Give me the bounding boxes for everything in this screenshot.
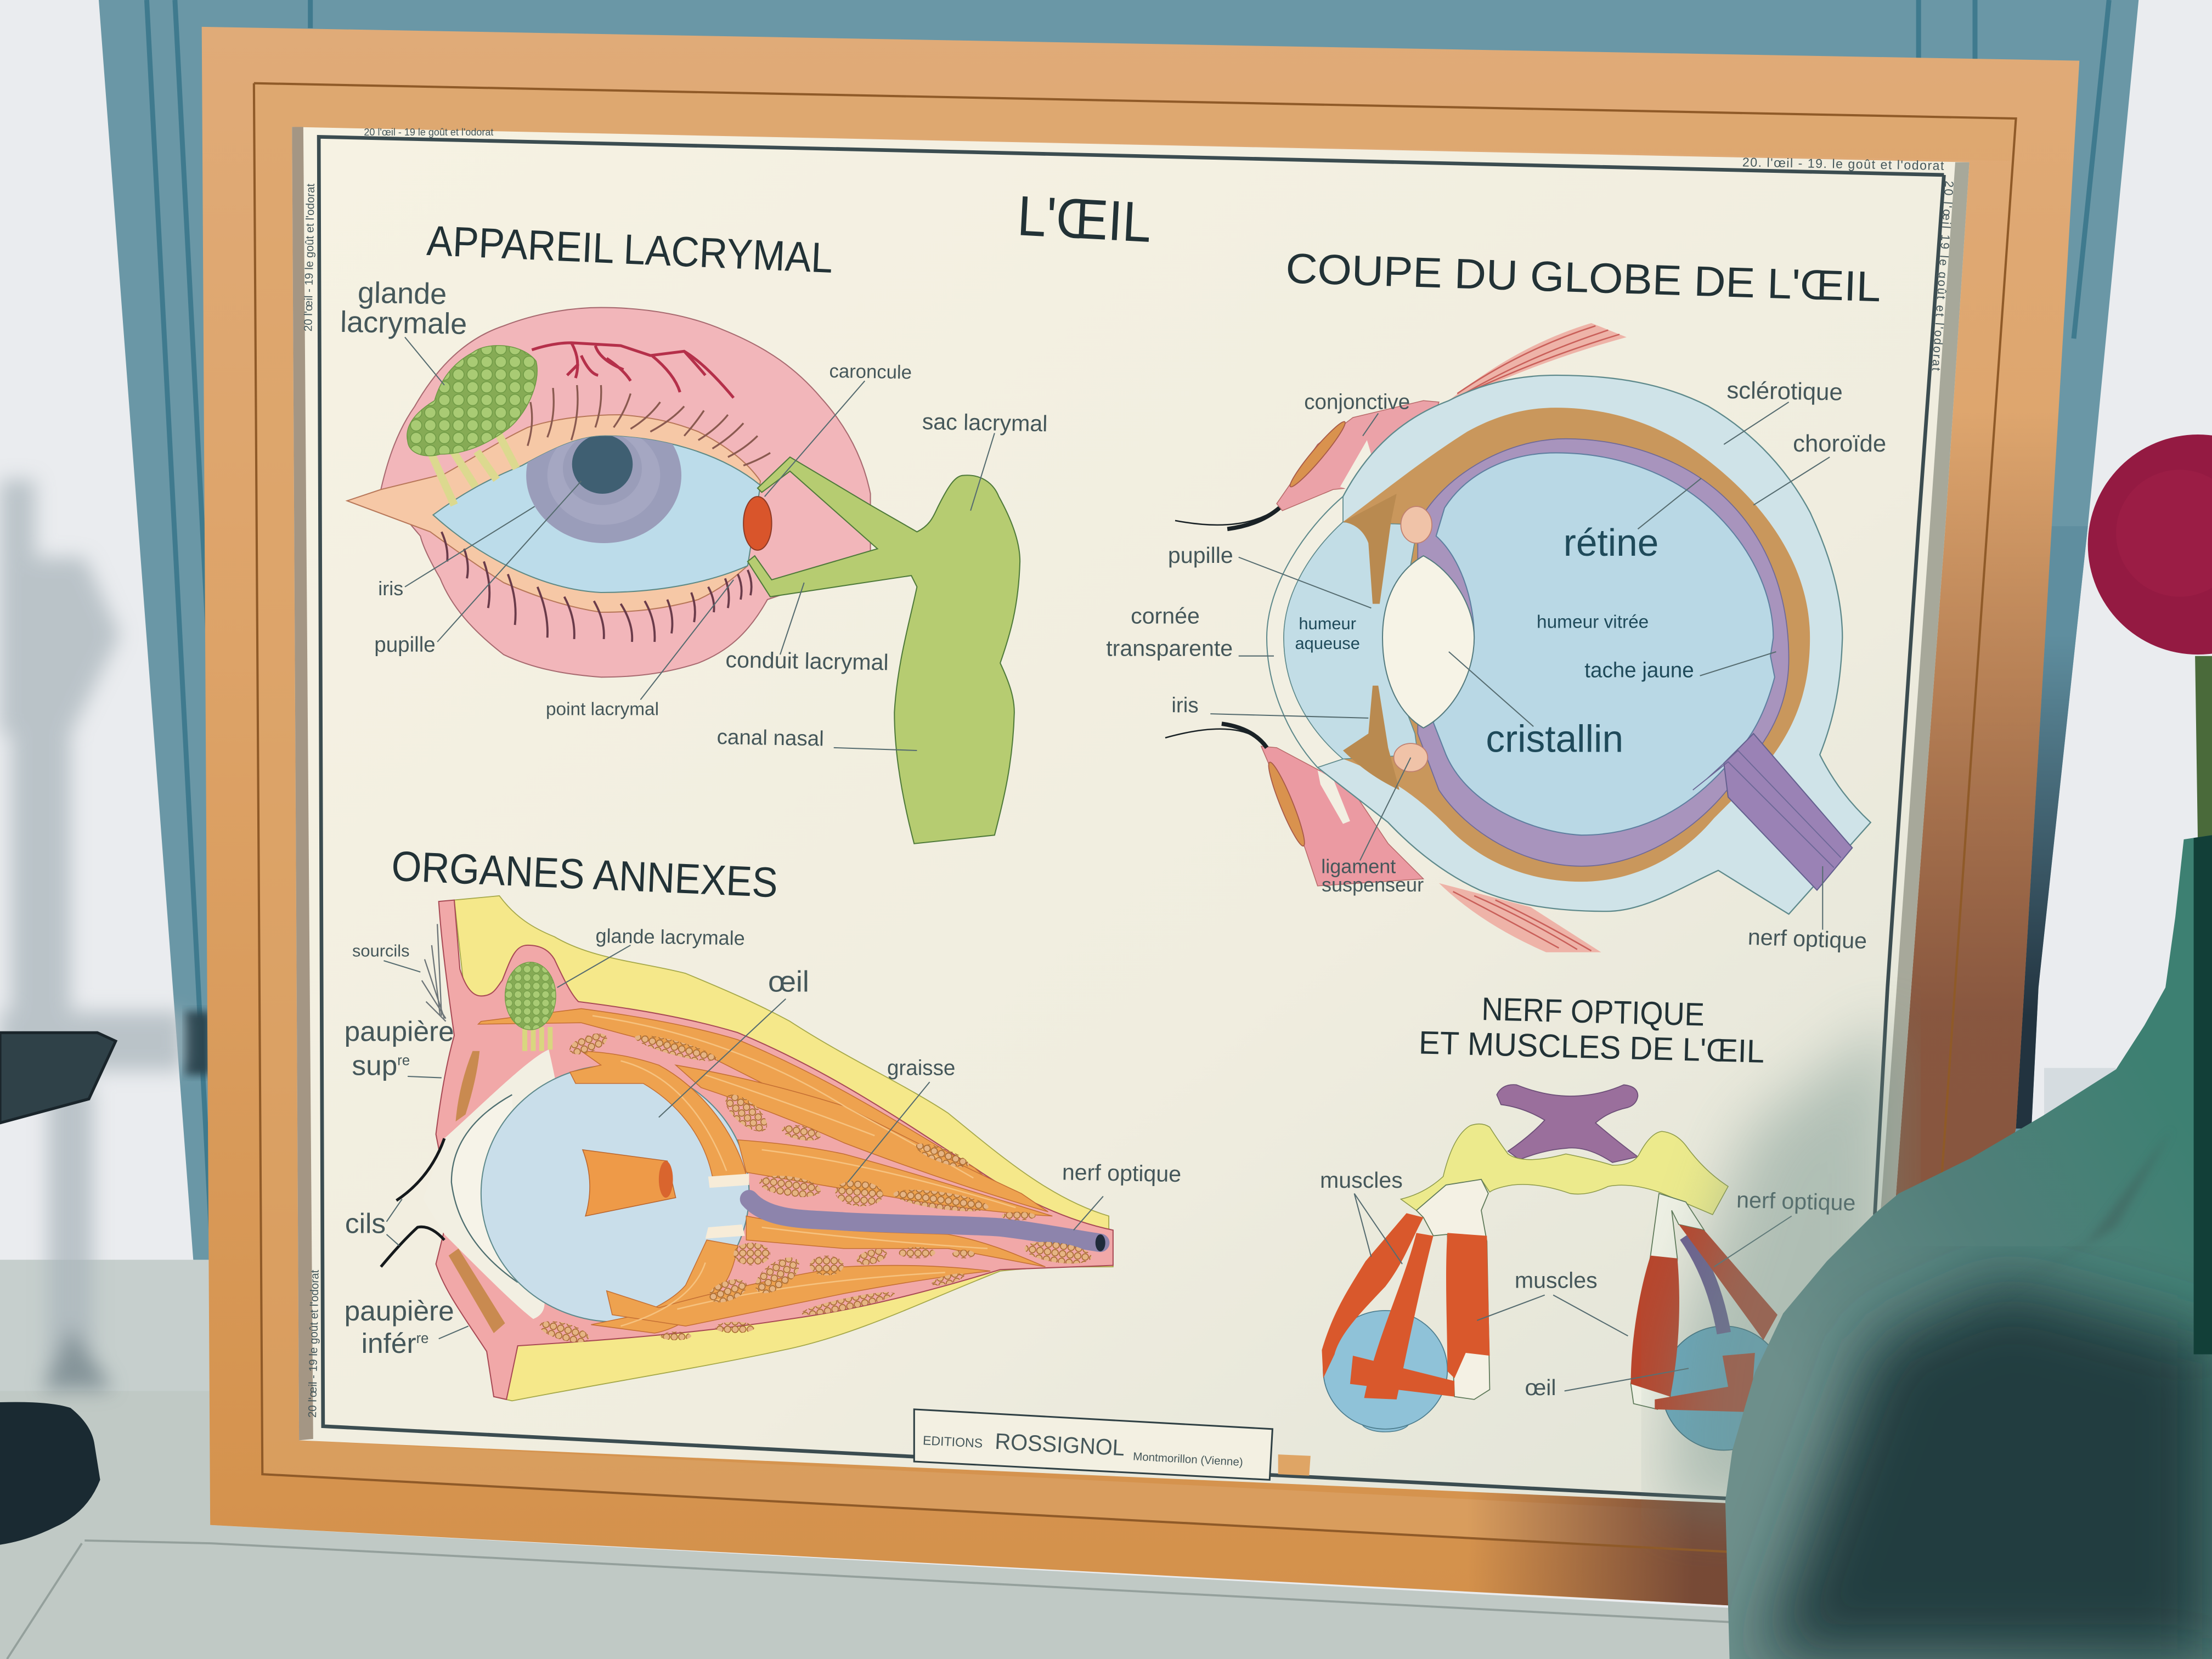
labels: humeur	[1299, 614, 1356, 633]
labels: paupière	[345, 1295, 454, 1327]
pedestal	[0, 1402, 100, 1545]
leader lines	[1210, 402, 1830, 930]
lacrimal gland	[407, 346, 537, 505]
labels	[1320, 1167, 1856, 1400]
heading: nerf optique et muscles: ET MUSCLES DE L'ŒIL	[1418, 1024, 1765, 1070]
margin strip text: 20 l'œil - 19 le goût et l'odorat	[306, 1269, 321, 1418]
lens	[1383, 556, 1474, 728]
margin strip text: 20 l'œil - 19 le goût et l'odorat	[302, 183, 317, 331]
paper tab	[1278, 1454, 1311, 1476]
iris sections	[1343, 494, 1397, 604]
vitreous humor	[1434, 453, 1775, 835]
labels	[1106, 377, 1886, 953]
poster border	[319, 137, 1944, 1499]
optic nerve	[749, 1199, 1101, 1243]
main title: L'ŒIL	[1016, 184, 1153, 254]
right tendons	[1631, 1193, 1704, 1409]
optic nerve	[1724, 733, 1852, 890]
labels: infér	[362, 1327, 416, 1359]
tray object	[0, 1032, 116, 1123]
labels: caroncule	[829, 361, 912, 383]
labels: glande	[358, 276, 447, 311]
lower muscle	[1439, 883, 1601, 952]
labels: point lacrymal	[546, 699, 659, 720]
flower	[2088, 435, 2212, 847]
globe of the eye	[481, 1065, 749, 1322]
eyelid band	[347, 415, 760, 612]
margin strip text: 20 l'œil 19 le goût et l'odorat	[1929, 180, 1956, 371]
labels: re	[397, 1053, 410, 1068]
lower eyelid	[1165, 724, 1424, 886]
labels: œil	[1525, 1375, 1556, 1400]
labels: pupille	[374, 633, 436, 657]
labels: muscles	[1515, 1268, 1598, 1293]
diagram: organes annexes	[345, 896, 1182, 1401]
labels: suspenseur	[1322, 873, 1424, 896]
margin strip text: 20 l'œil - 19 le goût et l'odorat	[364, 127, 493, 138]
eyelid tarsus	[449, 1051, 505, 1333]
labels: sac lacrymal	[922, 409, 1048, 436]
wall socket	[2044, 1068, 2116, 1128]
pink eye socket	[381, 308, 871, 677]
leader lines	[405, 337, 995, 751]
heading: coupe du globe: COUPE DU GLOBE DE L'ŒIL	[1285, 245, 1882, 311]
labels: canal nasal	[716, 725, 824, 751]
upper muscle	[1449, 323, 1627, 400]
right eyeball	[1662, 1326, 1786, 1450]
publisher box: ROSSIGNOL	[994, 1429, 1125, 1460]
right optic nerve	[1686, 1236, 1724, 1333]
labels: tache jaune	[1584, 658, 1694, 682]
pink orbital tissue	[436, 900, 1113, 1400]
muscle seen end-on	[583, 1150, 676, 1216]
labels: aqueuse	[1295, 634, 1360, 653]
left tendons	[1417, 1180, 1489, 1400]
yellow fat envelope	[454, 896, 1113, 1401]
margin strip text	[302, 127, 1956, 1418]
white gap between eye and lids	[423, 1049, 565, 1319]
labels: ligament	[1321, 855, 1396, 878]
shadow from bottle on paper	[1664, 1015, 1898, 1516]
suspensory ligament	[1401, 506, 1432, 543]
labels: nerf optique	[1747, 924, 1867, 953]
blood vessels	[532, 343, 733, 398]
sclera	[1267, 375, 1871, 914]
labels: sourcils	[352, 941, 410, 960]
sclera	[433, 436, 760, 592]
labels: conjonctive	[1304, 391, 1410, 414]
labels: lacrymale	[340, 306, 467, 341]
labels: cornée	[1131, 603, 1200, 629]
heading: organes annexes: ORGANES ANNEXES	[391, 843, 779, 906]
muscle stripes	[592, 1015, 1015, 1326]
labels: iris	[378, 577, 403, 600]
labels: humeur vitrée	[1537, 612, 1649, 632]
muscles	[478, 1009, 1052, 1333]
lacrimal gland	[505, 962, 556, 1051]
diagram: appareil lacrymal	[340, 276, 1048, 844]
retina	[1418, 439, 1789, 866]
labels	[345, 924, 1182, 1359]
labels: glande lacrymale	[595, 924, 745, 950]
labels: sclérotique	[1726, 377, 1843, 406]
labels: sup	[352, 1049, 397, 1081]
optic chiasma	[1497, 1085, 1638, 1163]
left eyeball	[1323, 1311, 1447, 1432]
aqueous humor	[1284, 522, 1418, 759]
labels: rétine	[1564, 521, 1658, 564]
cornea arc	[452, 1094, 518, 1282]
eyebrow hairs	[422, 924, 446, 1022]
labels: œil	[768, 966, 809, 998]
right muscles	[1631, 1224, 1778, 1412]
labels: transparente	[1106, 636, 1233, 661]
yellow sheath	[1401, 1124, 1728, 1215]
glass bottle	[1721, 832, 2212, 1659]
upper eyelid	[1175, 400, 1439, 529]
cornea gap	[1267, 496, 1343, 768]
labels: cristallin	[1486, 718, 1623, 760]
upper lashes	[528, 385, 770, 466]
leader lines	[1355, 1193, 1792, 1391]
labels: graisse	[887, 1056, 955, 1080]
margin strip text: 20. l'œil - 19. le goût et l'odorat	[1742, 155, 1944, 173]
choroid	[1343, 408, 1810, 882]
poster paper	[292, 127, 1970, 1509]
publisher box: EDITIONS	[922, 1433, 983, 1451]
frame shadows	[1728, 61, 2079, 1605]
left muscles	[1322, 1213, 1489, 1400]
labels: cils	[345, 1207, 386, 1239]
labels: muscles	[1320, 1167, 1403, 1193]
labels: iris	[1171, 694, 1199, 718]
labels: nerf optique	[1736, 1187, 1856, 1216]
labels: paupière	[345, 1015, 454, 1047]
heading: appareil lacrymal: APPAREIL LACRYMAL	[426, 217, 834, 282]
caruncle	[743, 496, 772, 550]
labels: nerf optique	[1062, 1159, 1182, 1187]
labels: re	[416, 1331, 428, 1346]
tendon spots	[706, 1173, 749, 1239]
labels	[340, 276, 1048, 751]
publisher box: Montmorillon (Vienne)	[1133, 1450, 1243, 1469]
heading: nerf optique et muscles	[1418, 990, 1765, 1070]
tear duct system	[748, 457, 1020, 844]
diagram: nerf optique et muscles	[1320, 1085, 1856, 1450]
fat clusters	[538, 1029, 1093, 1346]
iris and pupil	[526, 436, 681, 543]
leader lines	[383, 945, 1103, 1339]
lower lashes	[442, 532, 752, 642]
heading: nerf optique et muscles: NERF OPTIQUE	[1481, 990, 1705, 1033]
labels: choroïde	[1793, 430, 1886, 457]
diagram: coupe du globe de l'oeil	[1106, 323, 1886, 953]
labels: conduit lacrymal	[725, 647, 889, 675]
labels: pupille	[1168, 543, 1233, 568]
eyelashes	[381, 1138, 444, 1267]
publisher box	[914, 1409, 1272, 1480]
